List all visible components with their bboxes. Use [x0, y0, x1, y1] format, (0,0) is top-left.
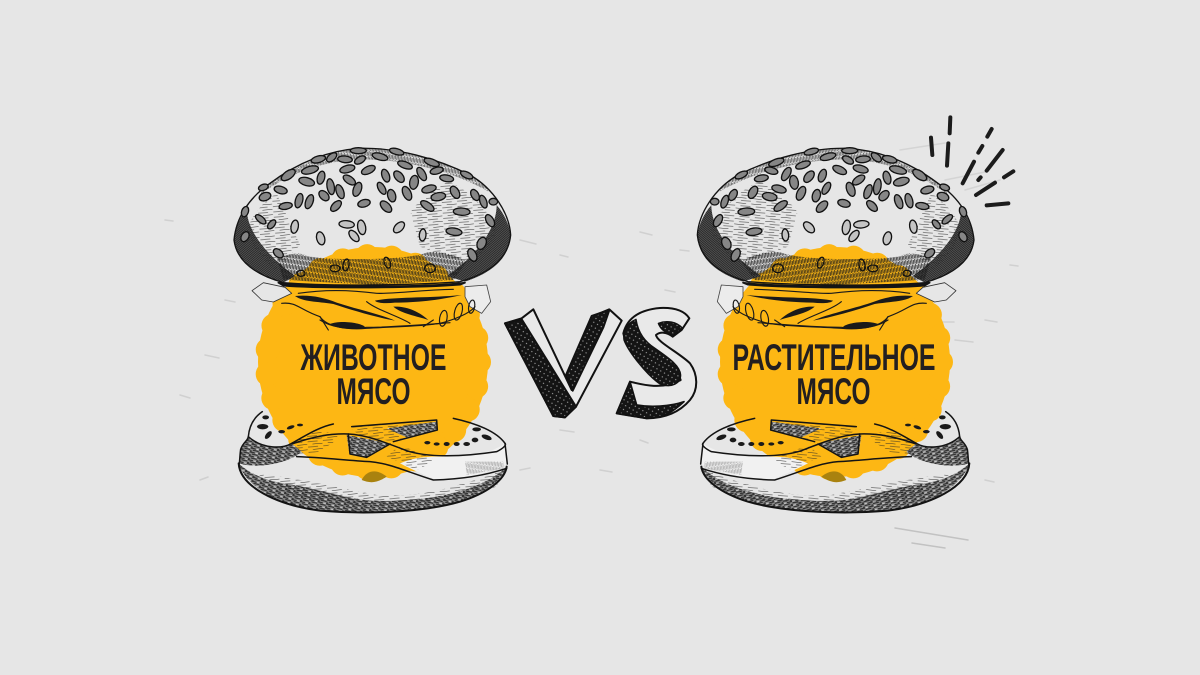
label: animal meat: МЯСО	[336, 371, 410, 412]
yellow badge right	[720, 247, 950, 477]
label: plant meat: МЯСО	[796, 371, 870, 412]
yellow badge left	[258, 247, 488, 477]
background specks	[165, 143, 1018, 548]
label: animal meat: ЖИВОТНОЕ	[300, 337, 446, 378]
VS lettering	[505, 308, 696, 418]
letter V	[505, 309, 622, 417]
burger right	[697, 147, 974, 512]
letter S	[617, 308, 696, 418]
burst lines icon	[931, 117, 1013, 205]
label: plant meat: РАСТИТЕЛЬНОЕ	[732, 337, 936, 378]
burger left	[234, 147, 511, 512]
